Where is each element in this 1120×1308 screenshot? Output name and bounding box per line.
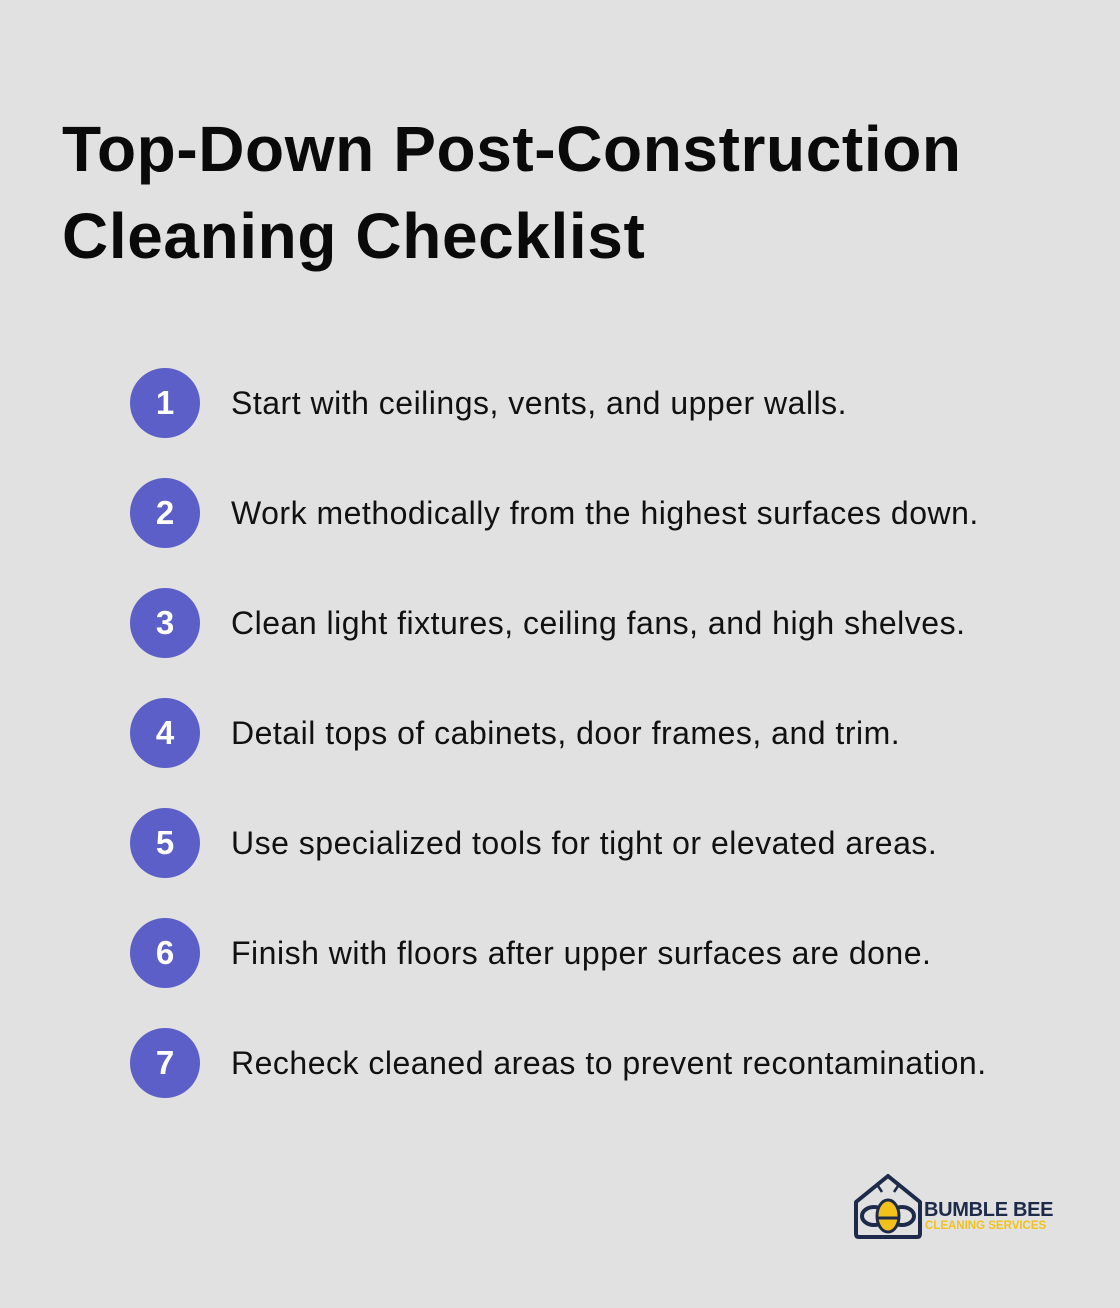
step 2: 2 xyxy=(156,494,174,531)
step 2: Work methodically from the highest surfaces down. xyxy=(231,495,979,531)
step 6: Finish with floors after upper surfaces are done. xyxy=(231,935,931,971)
step 7 xyxy=(130,1028,987,1098)
title: Top-Down Post-Construction xyxy=(62,113,962,185)
step 4: Detail tops of cabinets, door frames, and trim. xyxy=(231,715,900,751)
title xyxy=(62,113,962,272)
step 5: Use specialized tools for tight or elevated areas. xyxy=(231,825,937,861)
step 7: Recheck cleaned areas to prevent recontamination. xyxy=(231,1045,987,1081)
step 4 xyxy=(130,698,900,768)
step 3: Clean light fixtures, ceiling fans, and high shelves. xyxy=(231,605,965,641)
step 6 xyxy=(130,918,931,988)
icon: bee house xyxy=(854,1174,922,1239)
step 6: 6 xyxy=(156,934,174,971)
step 1: Start with ceilings, vents, and upper walls. xyxy=(231,385,847,421)
logo text: BUMBLE BEE xyxy=(924,1199,1053,1221)
step 1: 1 xyxy=(156,384,174,421)
step 2 xyxy=(130,478,979,548)
logo: CLEANING SERVICES xyxy=(925,1220,1046,1232)
step 4: 4 xyxy=(156,714,174,751)
logo xyxy=(854,1174,1053,1239)
step 7: 7 xyxy=(156,1044,174,1081)
step 5 xyxy=(130,808,937,878)
title: Cleaning Checklist xyxy=(62,200,645,272)
step 3 xyxy=(130,588,965,658)
step 1 xyxy=(130,368,847,438)
step 3: 3 xyxy=(156,604,174,641)
step 5: 5 xyxy=(156,824,174,861)
